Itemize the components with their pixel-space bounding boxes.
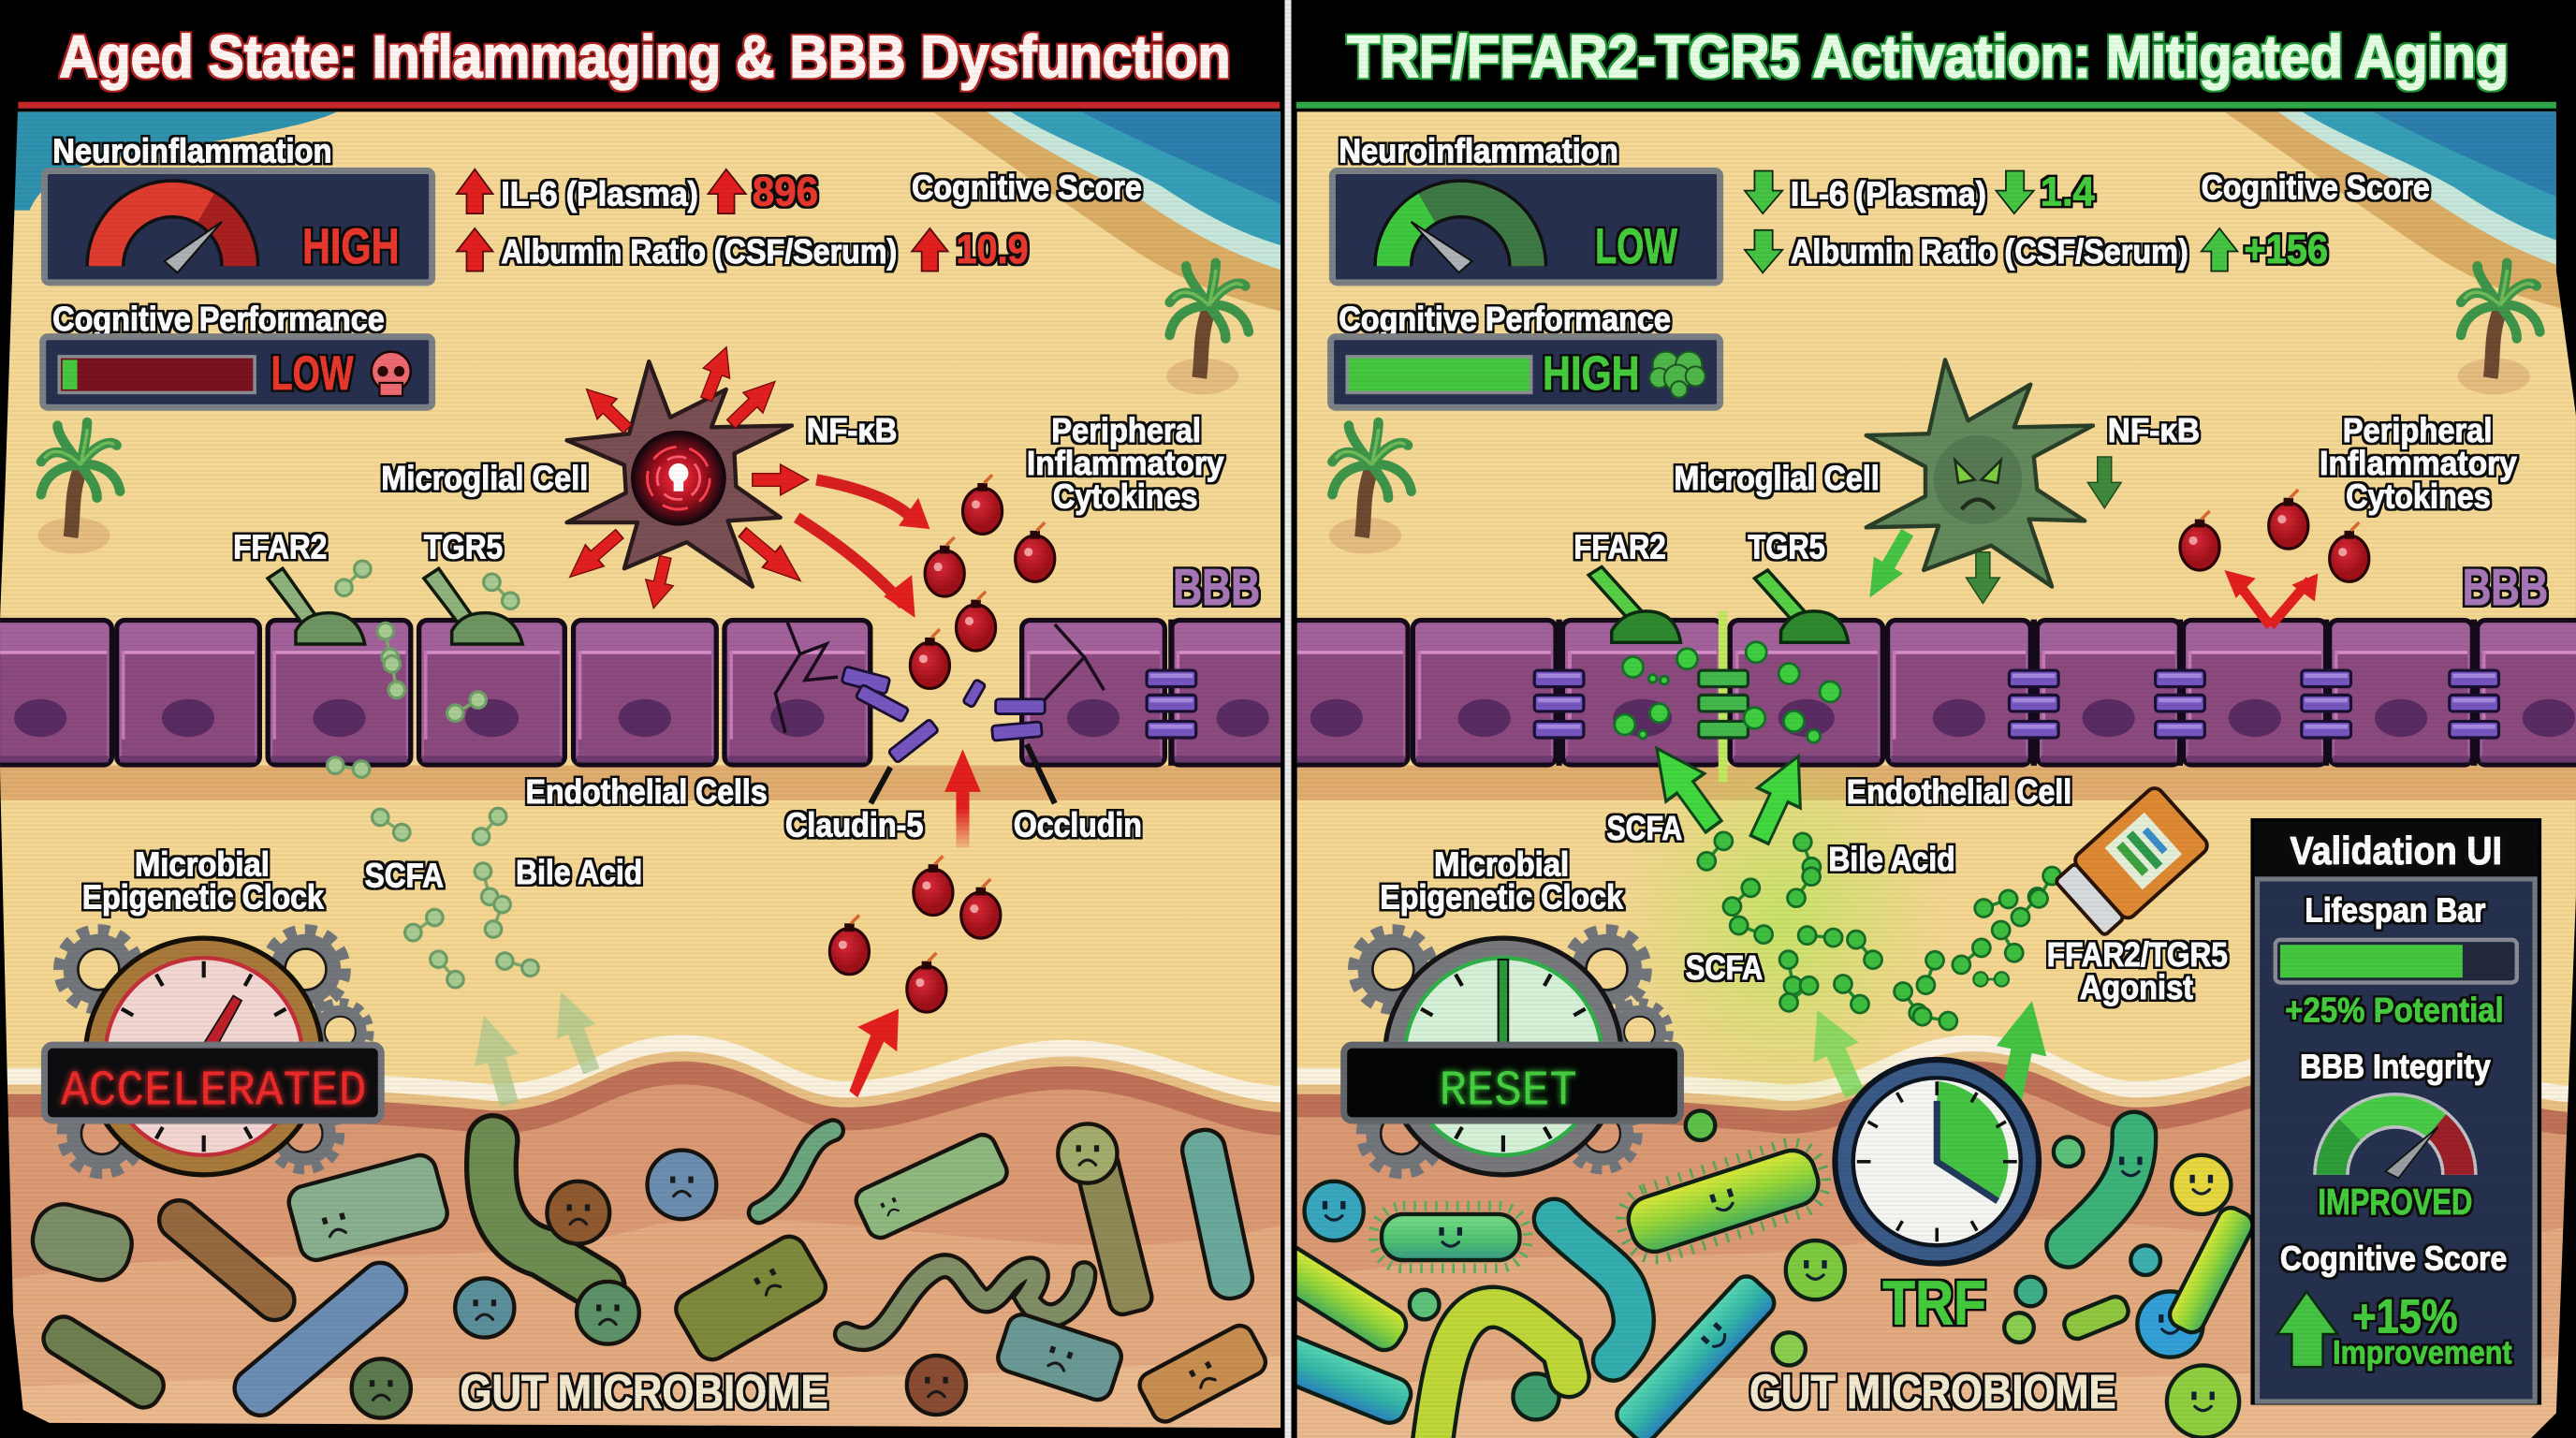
labels, aged scene: Microglial Cell [381,459,588,497]
gut microbiome: healthy bacteria [1252,1110,2257,1438]
active molecules entering cells [1615,642,1840,742]
receptor: FFAR2 [268,568,365,644]
icon: skull [372,352,411,396]
labels, TRF scene: BBB [2463,559,2548,616]
green glow [1653,766,1911,1101]
labels, TRF scene: Agonist [2080,968,2193,1006]
microglial cell, calm [1866,360,2093,587]
leader lines [871,744,1055,803]
red V deflection arrows [2224,570,2318,626]
IL-6 row, TRF [1745,169,2095,214]
labels, TRF scene [1380,411,2548,1418]
pale SCFA and bile acid molecules [326,557,540,991]
BBB integrity label: BBB Integrity [2300,1047,2491,1085]
improved label: IMPROVED [2318,1182,2472,1223]
receptor: FFAR2 active [1588,566,1680,642]
green tight junction [1699,611,1748,782]
labels, TRF scene: NF-κB [2108,411,2200,449]
neuroinflammation gauge panel, TRF [1332,171,1720,283]
cognitive performance panel, aged [43,337,432,407]
labels, aged scene: SCFA [365,857,444,895]
cognitive performance label, aged: Cognitive Performance [52,300,385,338]
lifespan bar [2276,940,2517,983]
TRF clock [1835,1060,2039,1264]
palm tree [1329,422,1412,553]
albumin ratio row, TRF [1745,227,2328,272]
cytokine bombs [2180,490,2369,581]
endothelial cell row [1265,621,2576,765]
labels, TRF scene: GUT MICROBIOME [1749,1365,2116,1418]
IL-6 row, aged: 896 [753,169,818,214]
labels, aged scene: Microbial [135,844,270,883]
cognitive score label, aged: Cognitive Score [912,168,1142,206]
labels, aged scene [82,411,1260,1418]
gut microbiome: dysbiotic bacteria [26,1123,1270,1426]
bright arrow from TRF [1985,996,2057,1107]
improvement label: Improvement [2333,1335,2512,1372]
lifespan bar label: Lifespan Bar [2305,891,2485,930]
neuroinflammation gauge panel, aged [44,171,432,283]
labels, TRF scene: Endothelial Cell [1847,772,2071,811]
albumin ratio row, TRF: Albumin Ratio (CSF/Serum) [1791,232,2188,271]
labels, TRF scene: FFAR2/TGR5 [2047,935,2228,974]
pale arrow from TRF [1794,1000,1878,1105]
microbial epigenetic clock, reset [1344,930,1680,1175]
labels, aged scene: Claudin-5 [785,805,923,844]
cognitive score label, TRF: Cognitive Score [2202,168,2430,206]
arrows from microglia [1855,457,2121,606]
IL-6 row, TRF: IL-6 (Plasma) [1791,174,1986,213]
labels, aged scene: Cytokines [1053,477,1197,515]
bright arrows to BBB [1637,734,1820,849]
labels, TRF scene: Cytokines [2346,477,2491,515]
labels, TRF scene: TGR5 [1748,528,1825,566]
albumin ratio row, aged: 10.9 [956,227,1029,272]
microbial epigenetic clock, accelerated: ACCELERATED [61,1063,366,1119]
labels, aged scene: TGR5 [424,528,503,566]
scattered SCFA, bile acid and agonist molecules [1694,829,2064,1032]
top-left sea [0,111,337,211]
cognitive performance label, TRF: Cognitive Performance [1339,300,1671,338]
red arrow from gut [849,1009,899,1097]
tight junction stacks [1534,620,2498,766]
labels, TRF scene: TRF [1882,1269,1986,1339]
labels, TRF scene: Bile Acid [1828,840,1955,878]
labels, TRF scene: SCFA [1606,809,1682,847]
cognitive performance panel, aged: LOW [271,346,353,400]
curved red arrows to cytokines [797,479,929,618]
panel: TRF activated state [1252,109,2576,1438]
endothelial cell row [0,621,1314,765]
title: aged state: Aged State: Inflammaging & BBB Dysfunction [59,22,1231,90]
title bar: TRF [1296,0,2576,109]
center divider [1281,0,1297,1438]
labels, aged scene: Epigenetic Clock [82,878,325,917]
IL-6 row, TRF: 1.4 [2041,169,2095,214]
icon: brain [1649,352,1705,398]
labels, aged scene: Peripheral [1051,411,1201,449]
IL-6 row, aged [457,169,818,214]
labels, TRF scene: Microbial [1434,844,1569,883]
labels, aged scene: GUT MICROBIOME [460,1365,828,1418]
microbial epigenetic clock, accelerated [44,930,381,1175]
bottom-right screen corner [2530,98,2576,1438]
pill bottle: FFAR2/TGR5 agonist [2052,785,2211,939]
labels, TRF scene: Inflammatory [2320,444,2517,482]
labels, TRF scene: Microglial Cell [1674,459,1880,497]
labels, TRF scene: Epigenetic Clock [1380,878,1624,917]
broken junction fragments [842,667,1045,763]
labels, TRF scene: Peripheral [2343,411,2492,449]
neuroinflammation label, aged: Neuroinflammation [52,132,332,170]
panel: aged state [0,109,1314,1438]
albumin ratio row, aged [457,227,1029,272]
receptor: TGR5 active [1754,570,1848,642]
labels, aged scene: BBB [1173,559,1260,616]
labels, aged scene: Occludin [1014,805,1142,844]
albumin ratio row, TRF: +156 [2244,227,2328,272]
peripheral cytokine bombs [829,475,1055,1012]
pale green arrows from gut [475,991,599,1107]
BBB integrity gauge [2331,1110,2459,1178]
labels, aged scene: Endothelial Cells [526,772,768,811]
labels, TRF scene: SCFA [1686,948,1763,987]
receptor: TGR5 [424,568,522,644]
neuroinflammation gauge panel, TRF: LOW [1595,219,1677,274]
cognitive gain value: +15% [2352,1289,2458,1343]
cognitive score label: Cognitive Score [2280,1240,2507,1278]
red arrow through BBB gap [944,749,981,848]
neuroinflammation label, TRF: Neuroinflammation [1339,132,1618,170]
labels, aged scene: Bile Acid [516,853,642,891]
microbial epigenetic clock, reset: RESET [1439,1063,1577,1119]
title bar: aged [0,0,1281,109]
validation UI panel [2252,820,2539,1403]
red signal arrows from microglia [561,342,810,611]
up arrow [2277,1291,2337,1367]
albumin ratio row, aged: Albumin Ratio (CSF/Serum) [501,232,897,271]
cognitive performance panel, TRF: HIGH [1543,346,1640,400]
neuroinflammation gauge panel, aged: HIGH [302,219,400,274]
tight junction stack [1147,620,1196,766]
labels, aged scene: FFAR2 [233,528,327,566]
lifespan potential value: +25% Potential [2285,991,2504,1030]
IL-6 row, aged: IL-6 (Plasma) [501,174,698,213]
heading: validation UI: Validation UI [2291,829,2502,873]
labels, TRF scene: FFAR2 [1573,528,1666,566]
labels, aged scene: NF-κB [807,411,897,449]
microglial cell, inflamed [567,361,792,587]
palm tree [37,422,120,553]
labels, aged scene: Inflammatory [1027,444,1224,482]
bottom-left screen edge [0,98,1283,1438]
cognitive performance panel, TRF [1331,337,1720,407]
